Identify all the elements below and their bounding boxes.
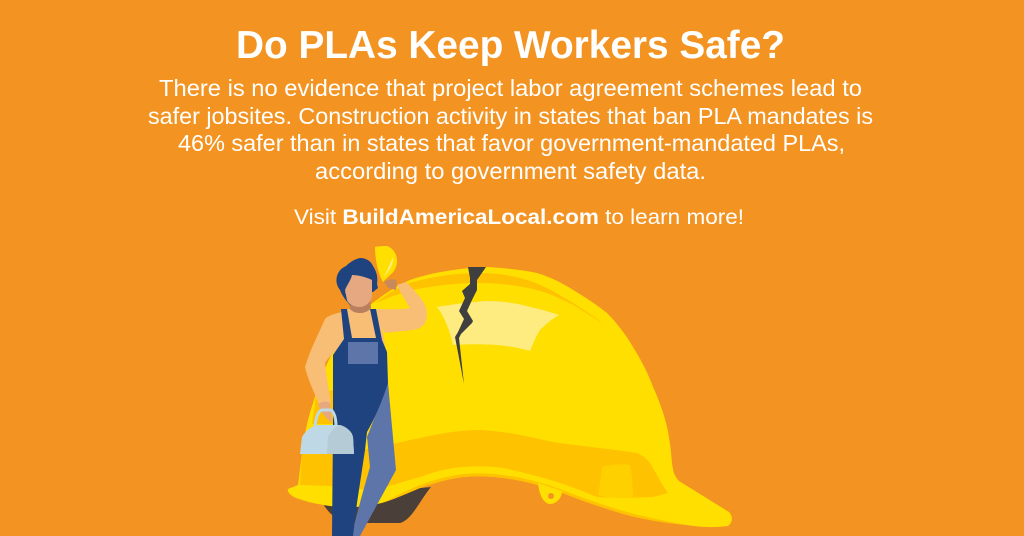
worker left arm <box>305 312 344 404</box>
body text block <box>148 75 873 184</box>
worker bib pocket <box>348 342 378 364</box>
illustration: worker <box>300 246 427 536</box>
worker neck <box>350 298 371 313</box>
hat left band above toolbox <box>312 390 333 424</box>
toolbox body <box>300 425 354 454</box>
hat shell <box>288 267 732 527</box>
hat lower rim edge <box>385 473 687 525</box>
hat vent tab <box>598 464 633 498</box>
hat band <box>300 430 668 498</box>
body text block: There is no evidence that project labor agreement schemes lead to <box>159 75 862 101</box>
worker arm raised <box>372 282 427 333</box>
body text block: according to government safety data. <box>315 158 706 184</box>
hat clip <box>538 483 562 504</box>
toolbox handle <box>315 410 336 426</box>
hat highlight <box>437 301 559 351</box>
body text block: safer jobsites. Construction activity in states that ban PLA mandates is <box>148 103 873 129</box>
worker hand on toolbox <box>318 402 332 422</box>
illustration: cracked hard hat <box>288 267 732 527</box>
toolbox <box>300 410 354 454</box>
call to action: Visit BuildAmericaLocal.com to learn more! <box>294 205 744 229</box>
worker hair <box>336 258 378 306</box>
body text block: 46% safer than in states that favor government-mandated PLAs, <box>178 130 845 156</box>
worker hand raised <box>384 279 397 290</box>
small hat in hand <box>375 246 397 282</box>
worker torso <box>340 309 386 352</box>
title: Do PLAs Keep Workers Safe? <box>236 24 785 67</box>
worker far leg <box>352 383 396 536</box>
worker overalls <box>332 309 388 536</box>
hat crack <box>455 267 486 384</box>
hat inner shadow <box>321 487 431 523</box>
hat top ridge <box>376 273 605 325</box>
worker face <box>345 275 372 307</box>
